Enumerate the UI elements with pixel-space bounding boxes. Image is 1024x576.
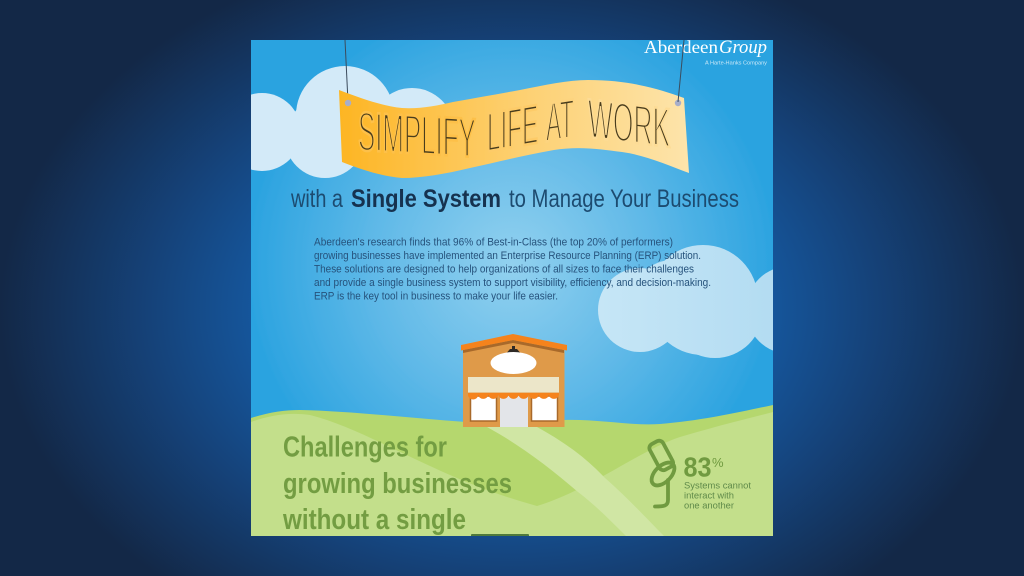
subtitle: with a: [290, 185, 343, 213]
subtitle: [291, 189, 738, 212]
intro text: ERP is the key tool in business to make your life easier.: [314, 290, 558, 302]
intro text: and provide a single business system to support visibility, efficiency, and decision-making.: [314, 277, 711, 289]
banner title: SIMPLIFY: [358, 101, 476, 170]
logo: Group: [719, 37, 767, 58]
logo: [644, 40, 767, 66]
store roof: [463, 340, 564, 353]
cloud: right: [598, 245, 773, 358]
intro text: Aberdeen's research finds that 96% of Best-in-Class (the top 20% of performers): [314, 236, 673, 248]
intro text: [314, 236, 711, 302]
logo: Aberdeen: [644, 37, 718, 57]
store right window: [532, 396, 558, 421]
rope: right: [678, 40, 684, 102]
sky: [251, 40, 773, 424]
road: [487, 427, 664, 536]
stat: 83 percent: [684, 457, 751, 508]
intro text: growing businesses have implemented an Enterprise Resource Planning (ERP) solution.: [314, 250, 701, 262]
stat: 83 percent: 83: [684, 452, 712, 482]
rope: left: [345, 40, 348, 102]
eyelet: left: [345, 100, 351, 106]
cloud: left: [251, 66, 445, 178]
eyelet: right: [675, 100, 681, 106]
stat: 83 percent: %: [712, 455, 724, 470]
store sign: [490, 352, 536, 374]
stat: 83 percent: one another: [684, 500, 735, 512]
heading: challenges: without a single: [282, 504, 466, 536]
banner title: AT: [546, 88, 574, 153]
stat: 83 percent: interact with: [684, 490, 734, 502]
subtitle: to Manage Your Business: [509, 185, 739, 213]
banner: [339, 80, 689, 178]
tab at bottom: [471, 534, 529, 536]
store band: [468, 377, 559, 392]
intro text: These solutions are designed to help organizations of all sizes to face their challenges: [314, 264, 695, 276]
store door: [500, 396, 528, 427]
logo: A Harte-Hanks Company: [705, 60, 767, 66]
banner title: LIFE: [487, 93, 538, 164]
store: [461, 334, 567, 427]
hills: [251, 405, 773, 536]
store awning: [468, 393, 559, 400]
panel: infographic: [251, 40, 773, 536]
store lamp: [507, 346, 520, 352]
banner title: WORK: [588, 89, 670, 160]
heading: challenges: [282, 432, 512, 536]
store left window: [470, 396, 496, 421]
heading: challenges: growing businesses: [283, 468, 512, 500]
subtitle: Single System: [351, 185, 501, 213]
store wall: [463, 338, 564, 427]
stat: 83 percent: Systems cannot: [684, 480, 751, 492]
heading: challenges: Challenges for: [283, 432, 447, 464]
banner title: [358, 98, 671, 158]
icon: broken chain: [647, 439, 679, 506]
